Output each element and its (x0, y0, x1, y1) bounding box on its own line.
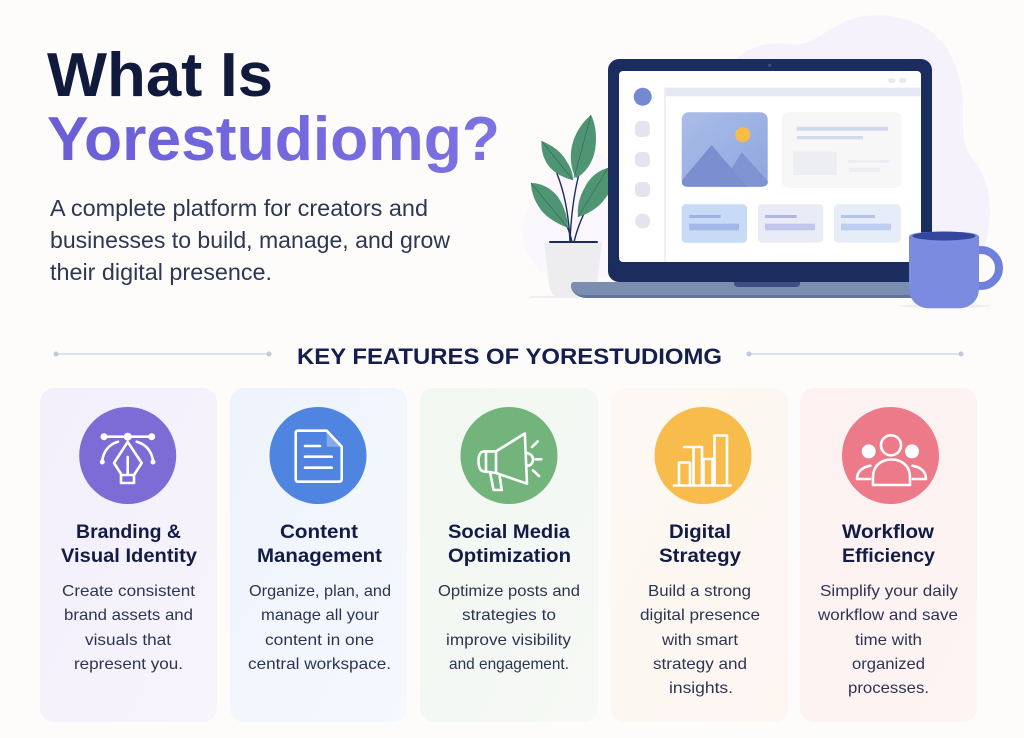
card title: Optimization (448, 545, 571, 567)
card description: processes. (848, 680, 929, 697)
card description: content in one (265, 632, 374, 649)
card: Workflow Efficiency (800, 388, 977, 722)
intro paragraph: businesses to build, manage, and grow (50, 227, 450, 253)
plant pot (544, 241, 602, 297)
card description: strategies to (462, 607, 556, 624)
title (47, 41, 500, 174)
intro paragraph: their digital presence. (50, 259, 272, 285)
image card (682, 112, 768, 187)
card title: Workflow (842, 521, 935, 543)
window controls (888, 78, 906, 83)
card: Branding & Visual Identity (40, 388, 217, 722)
card title (842, 521, 935, 567)
background blob (700, 15, 990, 292)
card description: and engagement. (449, 656, 569, 673)
card description: brand assets and (64, 607, 193, 624)
card description: insights. (669, 680, 733, 697)
icon: team (842, 407, 939, 504)
card title: Efficiency (842, 545, 935, 567)
laptop lid (608, 59, 932, 282)
card title: Management (257, 545, 383, 567)
card description: central workspace. (248, 656, 391, 673)
card description: workflow and save (817, 607, 958, 624)
card description: represent you. (74, 656, 183, 673)
card title: Digital (669, 521, 731, 543)
mug (909, 232, 999, 308)
title: What Is (47, 41, 273, 110)
title: Yorestudiomg? (47, 105, 500, 174)
icon: pen tool (79, 407, 176, 504)
text card (782, 113, 901, 187)
icon: document (270, 407, 366, 504)
card title (659, 521, 741, 567)
card description (817, 583, 958, 697)
card: Digital Strategy (611, 388, 788, 722)
laptop base (571, 282, 917, 298)
plant (531, 115, 610, 242)
small card 2 (758, 204, 823, 243)
card description: organized (852, 656, 925, 673)
card description: Organize, plan, and (249, 583, 391, 600)
card title: Visual Identity (61, 545, 197, 567)
card title (61, 521, 197, 567)
sidebar (634, 88, 652, 228)
intro paragraph: A complete platform for creators and (50, 195, 428, 221)
card: Social Media Optimization (420, 388, 598, 722)
small card 3 (834, 204, 901, 243)
card title: Branding & (76, 521, 181, 543)
section heading: KEY FEATURES OF YORESTUDIOMG (297, 344, 722, 369)
card: Content Management (230, 388, 407, 722)
card title: Content (280, 521, 359, 543)
card description (248, 583, 391, 673)
card description: with smart (661, 632, 739, 649)
intro paragraph (50, 195, 450, 285)
card description: strategy and (653, 656, 747, 673)
card description: Create consistent (62, 583, 196, 600)
top bar (664, 88, 920, 262)
card description: Build a strong (648, 583, 751, 600)
card description: visuals that (85, 632, 172, 649)
laptop (571, 59, 932, 298)
small card 1 (682, 204, 747, 243)
illustration: laptop with plant and mug (523, 15, 999, 308)
icon: megaphone (460, 407, 558, 504)
card description: digital presence (640, 607, 760, 624)
card description (640, 583, 760, 697)
mug shadow (899, 304, 991, 308)
card description (62, 583, 196, 673)
plant backdrop blob (523, 150, 615, 280)
laptop notch (734, 282, 800, 287)
card description: Optimize posts and (438, 583, 580, 600)
card description: improve visibility (446, 632, 571, 649)
section heading (54, 344, 964, 369)
laptop screen (619, 71, 921, 262)
card description: Simplify your daily (820, 583, 958, 600)
card title (257, 521, 383, 567)
card description: time with (855, 632, 922, 649)
card title: Social Media (448, 521, 570, 543)
card description: manage all your (261, 607, 380, 624)
card title (448, 521, 571, 567)
card description (438, 583, 580, 673)
plant shadow (530, 296, 580, 298)
icon: bar chart (654, 407, 752, 504)
card title: Strategy (659, 545, 741, 567)
